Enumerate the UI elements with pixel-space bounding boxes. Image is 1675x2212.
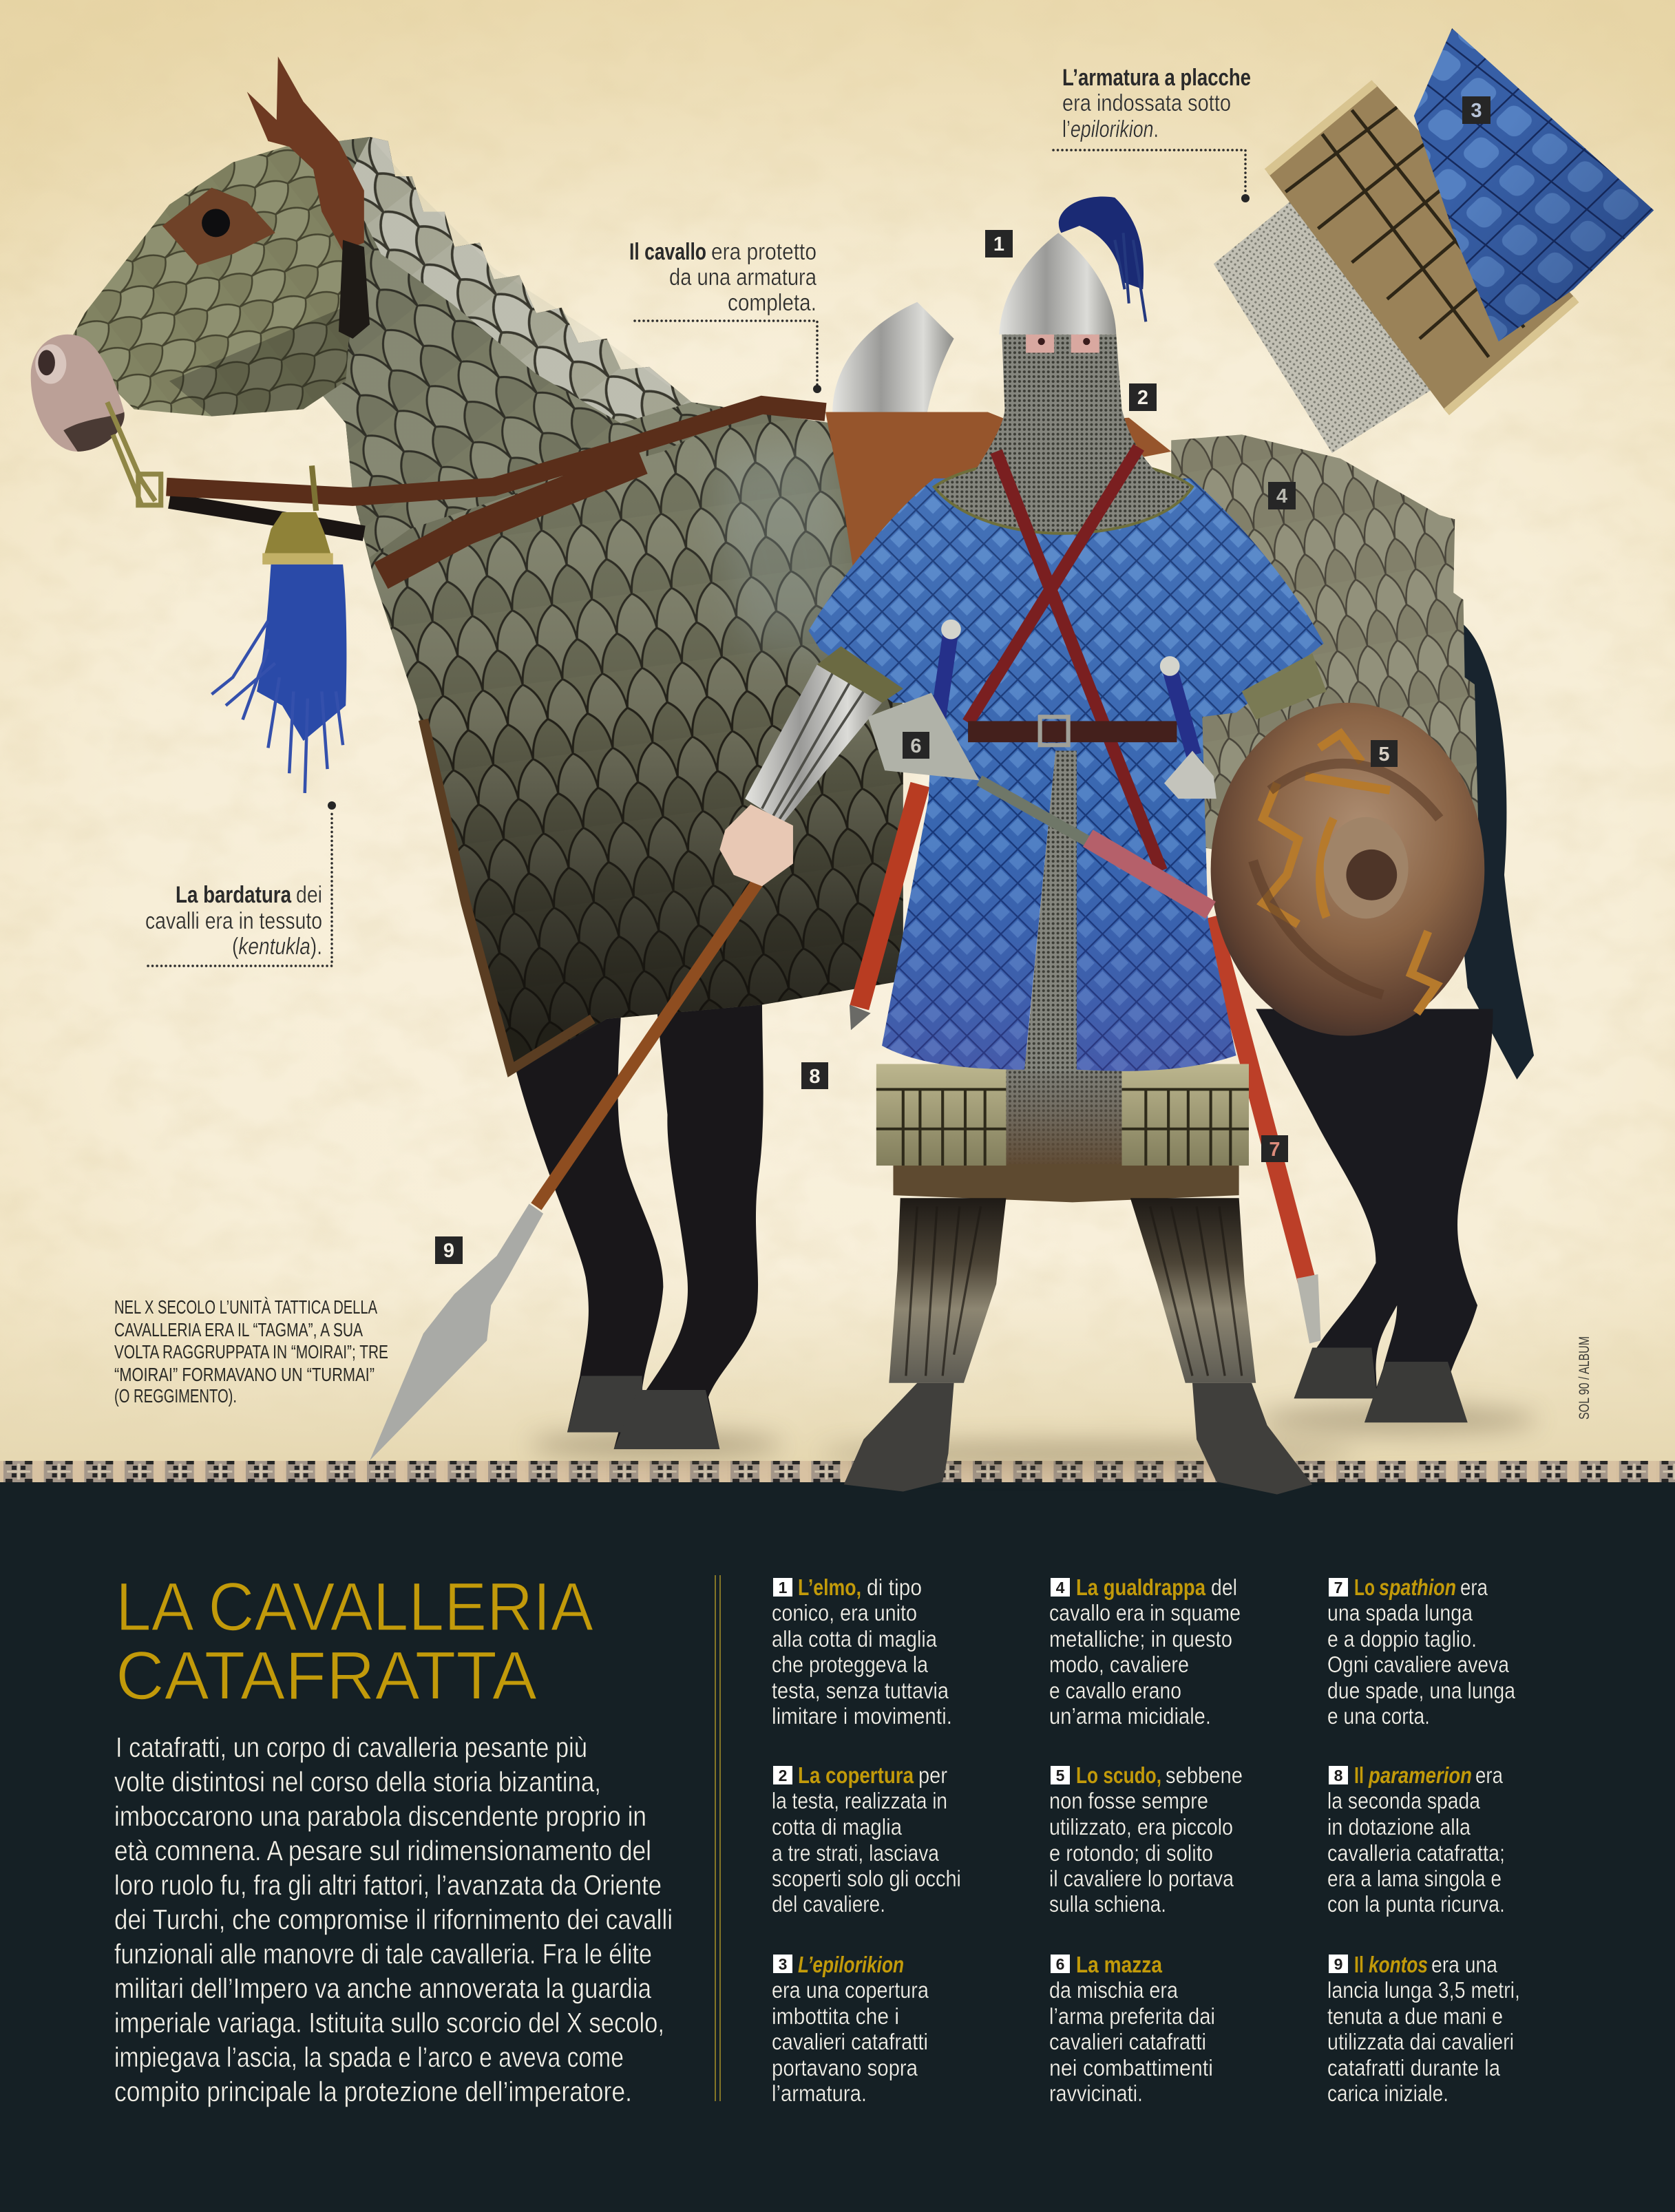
item 1: l'elmo: conico, era unito <box>772 1600 917 1625</box>
intro text: I catafratti, un corpo di cavalleria pesante più <box>116 1731 587 1763</box>
item 8: il paramerion: era <box>1475 1762 1504 1788</box>
marker 3 <box>1462 96 1490 124</box>
inset: quilted padding <box>1414 28 1654 341</box>
item 4: la gualdrappa: un’arma micidiale. <box>1049 1703 1211 1729</box>
marker 4 <box>1268 482 1296 509</box>
blue tassel <box>211 565 346 793</box>
right boot <box>1192 1383 1312 1495</box>
helmet plume <box>1059 197 1146 322</box>
blue quilted tunic (epilorikion) <box>808 478 1324 1071</box>
note: tagma <box>114 1296 388 1407</box>
ground shadow <box>529 1406 1538 1465</box>
item 5: lo scudo: il cavaliere lo portava <box>1049 1866 1234 1891</box>
item 4: la gualdrappa: metalliche; in questo <box>1049 1626 1232 1652</box>
intro text: età comnena. A pesare sul ridimensionamento del <box>114 1835 651 1866</box>
pommels <box>941 620 1180 676</box>
item 4: la gualdrappa: 4 <box>1056 1579 1065 1597</box>
intro text <box>114 1731 673 2107</box>
gold divider <box>715 1575 720 2101</box>
marker 8: 8 <box>809 1066 821 1088</box>
item 9: il kontos: tenuta a due mani e <box>1327 2003 1503 2029</box>
rear scale armour <box>1171 434 1479 875</box>
callout: il cavallo <box>629 239 821 393</box>
item 4: la gualdrappa <box>1049 1574 1241 1729</box>
marker 6: 6 <box>910 735 922 757</box>
item 7: lo spathion <box>1327 1574 1516 1729</box>
bell <box>262 465 333 565</box>
item 5: lo scudo: utilizzato, era piccolo <box>1049 1814 1233 1840</box>
marker 1 <box>985 230 1013 257</box>
item 2: la copertura: per <box>918 1762 947 1788</box>
item 1: l'elmo <box>772 1574 952 1729</box>
note: tagma: “MOIRAI” FORMAVANO UN “TURMAI” <box>114 1364 375 1385</box>
item 9: il kontos: era una <box>1431 1952 1498 1977</box>
item 1: l'elmo: 1 <box>779 1579 788 1597</box>
item 7: lo spathion: spathion <box>1379 1574 1456 1600</box>
left boot <box>844 1383 954 1492</box>
horse front legs <box>516 988 763 1449</box>
item 2: la copertura: 2 <box>779 1767 787 1784</box>
item 4: la gualdrappa: La gualdrappa <box>1076 1574 1206 1600</box>
right greave <box>1130 1198 1256 1383</box>
belt with buckle <box>968 717 1177 745</box>
item 5: lo scudo: sebbene <box>1166 1762 1243 1788</box>
red cross straps <box>968 447 1161 871</box>
left skirt plates <box>876 1064 1006 1166</box>
mail collar <box>934 459 1192 534</box>
marker 4: 4 <box>1276 485 1287 507</box>
horse eye <box>162 188 275 265</box>
illustration: horse and cataphract rider <box>31 28 1654 1495</box>
item 7: lo spathion: Lo <box>1354 1574 1375 1600</box>
item 1: l'elmo: L’elmo, <box>798 1574 861 1600</box>
title <box>116 1568 593 1714</box>
item 6: la mazza: l’arma preferita dai <box>1049 2003 1215 2029</box>
item 5: lo scudo: Lo scudo, <box>1076 1762 1161 1788</box>
callout: la bardatura: La bardatura <box>176 882 292 908</box>
item 6: la mazza: 6 <box>1056 1955 1064 1973</box>
item 5: lo scudo: e rotondo; di solito <box>1049 1840 1213 1866</box>
item 8: il paramerion: 8 <box>1334 1767 1343 1784</box>
horse rear legs <box>1256 1009 1493 1422</box>
item 8: il paramerion <box>1327 1762 1505 1917</box>
intro text: volte distintosi nel corso della storia bizantina, <box>114 1766 601 1798</box>
item 2: la copertura: scoperti solo gli occhi <box>772 1866 961 1891</box>
item 8: il paramerion: in dotazione alla <box>1327 1814 1471 1840</box>
item 5: lo scudo: 5 <box>1056 1767 1065 1784</box>
item 7: lo spathion: e a doppio taglio. <box>1327 1626 1477 1652</box>
item 1: l'elmo: testa, senza tuttavia <box>772 1678 949 1703</box>
item 6: la mazza: cavalieri catafratti <box>1049 2029 1206 2054</box>
item 3: l'epilorikion: imbottita che i <box>772 2003 899 2029</box>
neck strap dark under <box>169 501 364 534</box>
item 7: lo spathion: Ogni cavaliere aveva <box>1327 1652 1510 1677</box>
mail coif <box>973 335 1157 473</box>
callout: il cavallo: da una armatura <box>669 264 817 291</box>
marker 2 <box>1129 383 1157 411</box>
item 7: lo spathion: e una corta. <box>1327 1703 1430 1729</box>
saddle blanket <box>825 412 1171 581</box>
marker 3: 3 <box>1471 100 1482 122</box>
horse head with scales <box>63 141 352 417</box>
skirt centre mail <box>1004 1051 1126 1168</box>
note: tagma: CAVALLERIA ERA IL “TAGMA”, A SUA <box>114 1319 363 1340</box>
item 3: l'epilorikion: portavano sopra <box>772 2055 918 2081</box>
parchment background <box>0 0 1675 1461</box>
marker 9: 9 <box>443 1240 454 1262</box>
callout: armatura a placche: L’armatura a placche <box>1062 65 1251 91</box>
horse ears and brown poll <box>247 56 364 251</box>
item 8: il paramerion: paramerion <box>1368 1762 1472 1788</box>
item 3: l'epilorikion: l’armatura. <box>772 2081 867 2106</box>
item 2: la copertura <box>772 1762 961 1917</box>
item 7: lo spathion: due spade, una lunga <box>1327 1678 1516 1703</box>
item 4: la gualdrappa: cavallo era in squame <box>1049 1600 1241 1625</box>
intro text: militari dell’Impero va anche annoverata la guardia <box>114 1972 651 2004</box>
tunic chainmail slit <box>1024 750 1115 1073</box>
dark text panel <box>0 1482 1675 2212</box>
item 9: il kontos: 9 <box>1334 1955 1342 1973</box>
note: tagma: VOLTA RAGGRUPPATA IN “MOIRAI”; TRE <box>114 1341 388 1362</box>
left greave <box>889 1198 1006 1383</box>
item 6: la mazza: da mischia era <box>1049 1977 1179 2003</box>
note: tagma: NEL X SECOLO L’UNITÀ TATTICA DELLA <box>114 1296 377 1318</box>
item 8: il paramerion: la seconda spada <box>1327 1788 1481 1813</box>
right scabbard <box>1211 917 1321 1343</box>
callout: la bardatura <box>145 801 336 966</box>
eyes <box>1026 335 1099 352</box>
bard front fabric edge <box>423 719 593 1070</box>
item 2: la copertura: del cavaliere. <box>772 1891 885 1917</box>
item 7: lo spathion: 7 <box>1334 1579 1342 1597</box>
inset: chain mail <box>1214 183 1468 453</box>
item 1: l'elmo: alla cotta di maglia <box>772 1626 938 1652</box>
item 9: il kontos <box>1327 1952 1520 2106</box>
callout: armatura a placche <box>1053 65 1251 202</box>
marker 5: 5 <box>1378 744 1390 766</box>
item 7: lo spathion: una spada lunga <box>1327 1600 1473 1625</box>
bridle ring <box>107 402 161 505</box>
neck and body scale armour <box>310 137 903 1075</box>
decorative border band <box>0 1461 1675 1482</box>
mace <box>868 693 1211 910</box>
item 3: l'epilorikion <box>772 1952 929 2106</box>
image credit: SOL 90 / ALBUM <box>1577 1336 1592 1420</box>
item 5: lo scudo: sulla schiena. <box>1049 1891 1166 1917</box>
callout: il cavallo: era protetto <box>711 239 817 265</box>
item 6: la mazza: ravvicinati. <box>1049 2081 1143 2106</box>
marker 7 <box>1261 1135 1288 1162</box>
callout: il cavallo: completa. <box>728 290 817 316</box>
horse tail <box>1453 621 1534 1079</box>
item 4: la gualdrappa: modo, cavaliere <box>1049 1652 1189 1677</box>
callout: la bardatura: cavalli era in tessuto <box>145 908 322 934</box>
item 7: lo spathion: era <box>1460 1574 1488 1600</box>
intro text: impiegava l’ascia, la spada e l’arco e aveva come <box>114 2041 624 2073</box>
item 9: il kontos: kontos <box>1369 1952 1428 1977</box>
right skirt plates <box>1122 1064 1249 1166</box>
intro text: loro ruolo fu, fra gli altri fattori, l’avanzata da Oriente <box>114 1869 662 1901</box>
helmet <box>999 233 1116 335</box>
horse muzzle <box>31 335 125 452</box>
marker 5 <box>1371 740 1398 767</box>
item 3: l'epilorikion: 3 <box>779 1955 787 1973</box>
note: tagma: (O REGGIMENTO). <box>114 1385 237 1407</box>
horse rear hooves <box>1294 1347 1468 1422</box>
marker 8 <box>801 1062 828 1089</box>
intro text: funzionali alle manovre di tale cavalleria. Fra le élite <box>114 1938 652 1970</box>
marker 1: 1 <box>993 233 1004 255</box>
item 1: l'elmo: che proteggeva la <box>772 1652 929 1677</box>
marker 2: 2 <box>1137 387 1148 409</box>
lance shaft <box>536 851 779 1206</box>
saddle pommel <box>832 302 954 421</box>
left bracer <box>745 646 903 823</box>
callout: la bardatura: (kentukla). <box>232 934 322 960</box>
inset: lamellar plates <box>1267 83 1577 412</box>
item 2: la copertura: la testa, realizzata in <box>772 1788 947 1813</box>
skirt hem <box>893 1164 1239 1202</box>
item 9: il kontos: Il <box>1354 1952 1364 1977</box>
item 1: l'elmo: limitare i movimenti. <box>772 1703 952 1729</box>
item 2: la copertura: cotta di maglia <box>772 1814 903 1840</box>
item 3: l'epilorikion: era una copertura <box>772 1977 929 2003</box>
item 4: la gualdrappa: e cavallo erano <box>1049 1678 1181 1703</box>
item 3: l'epilorikion: cavalieri catafratti <box>772 2029 928 2054</box>
item 9: il kontos: utilizzata dai cavalieri <box>1327 2029 1514 2054</box>
item 3: l'epilorikion: L’epilorikion <box>798 1952 904 1977</box>
item 6: la mazza: nei combattimenti <box>1049 2055 1213 2081</box>
item 8: il paramerion: cavalleria catafratta; <box>1327 1840 1505 1866</box>
item 9: il kontos: carica iniziale. <box>1327 2081 1448 2106</box>
reins and breast strap <box>167 405 825 576</box>
item 1: l'elmo: di tipo <box>867 1574 922 1600</box>
callout: armatura a placche: l’epilorikion. <box>1062 116 1159 143</box>
item 5: lo scudo: non fosse sempre <box>1049 1788 1208 1813</box>
marker 6 <box>903 732 929 759</box>
item 5: lo scudo <box>1049 1762 1243 1917</box>
item 9: il kontos: lancia lunga 3,5 metri, <box>1327 1977 1520 2003</box>
item 6: la mazza <box>1049 1952 1215 2106</box>
neck dark gap <box>339 240 370 339</box>
callout: il cavallo: Il cavallo <box>629 239 706 265</box>
item 4: la gualdrappa: del <box>1211 1574 1237 1600</box>
lance head <box>370 1203 543 1460</box>
item 9: il kontos: catafratti durante la <box>1327 2055 1501 2081</box>
intro text: compito principale la protezione dell’imperatore. <box>114 2076 632 2107</box>
intro text: imperiale variaga. Istituita sullo scorcio del X secolo, <box>114 2007 664 2039</box>
item 2: la copertura: La copertura <box>798 1762 914 1788</box>
right gauntlet <box>1164 750 1216 799</box>
intro text: dei Turchi, che compromise il rifornimento dei cavalli <box>114 1904 673 1935</box>
callout: armatura a placche: era indossata sotto <box>1062 90 1231 116</box>
intro text: imboccarono una parabola discendente proprio in <box>114 1800 646 1832</box>
rider hand <box>719 804 793 886</box>
left scabbard <box>850 785 920 1030</box>
right cuff <box>1242 653 1327 719</box>
blue sword grips <box>937 629 1194 755</box>
item 6: la mazza: La mazza <box>1076 1952 1163 1977</box>
title: CATAFRATTA <box>116 1637 537 1714</box>
title: LA CAVALLERIA <box>116 1568 593 1645</box>
shield <box>1211 703 1484 1035</box>
item 8: il paramerion: con la punta ricurva. <box>1327 1891 1505 1917</box>
callout: la bardatura: dei <box>296 882 322 908</box>
item 2: la copertura: a tre strati, lasciava <box>772 1840 940 1866</box>
marker 7: 7 <box>1269 1139 1281 1161</box>
horse front hooves <box>567 1376 719 1449</box>
item 8: il paramerion: Il <box>1354 1762 1364 1788</box>
item 8: il paramerion: era a lama singola e <box>1327 1866 1502 1891</box>
marker 9 <box>435 1236 463 1264</box>
